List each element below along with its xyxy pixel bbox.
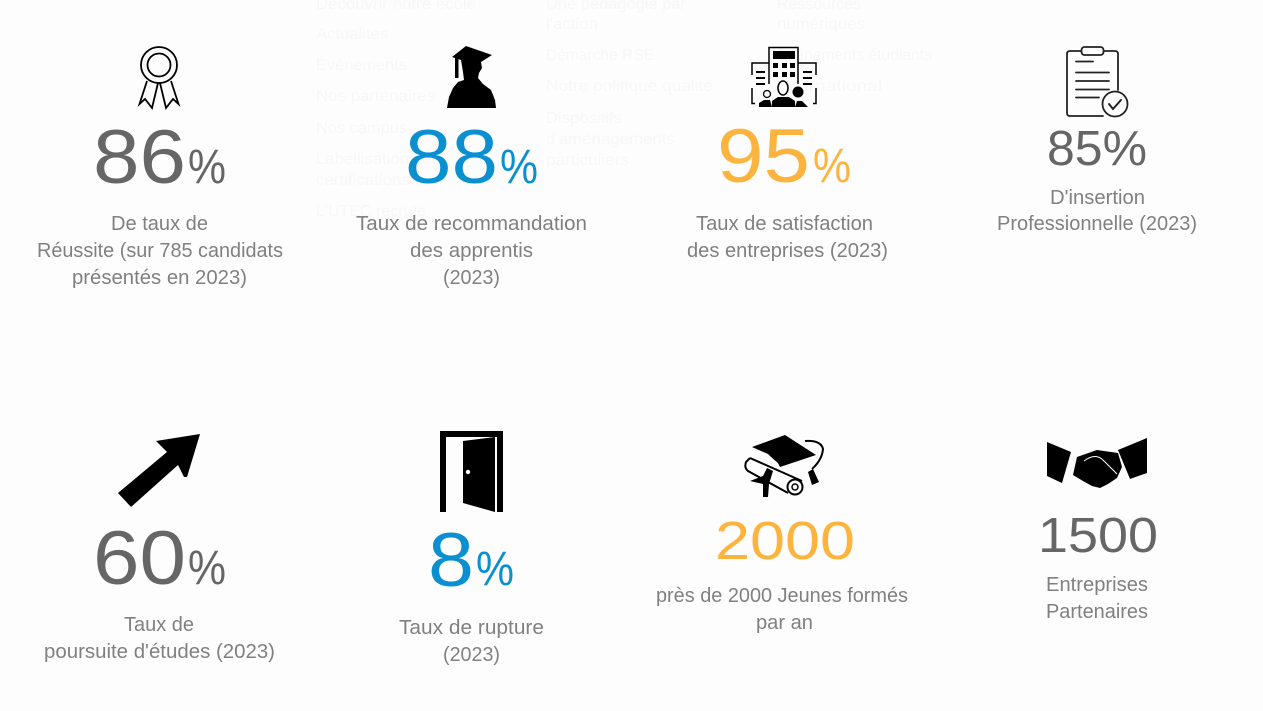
stat: 86%: % [188, 141, 226, 194]
description: De taux de [111, 213, 208, 235]
stat: 88% [405, 115, 538, 200]
stat: 2000: 2000 [715, 511, 855, 571]
description: (2023) [443, 267, 500, 289]
description [44, 614, 275, 663]
panel: entreprises partenaires 1500 [1038, 438, 1158, 623]
stat: 86%: 86 [93, 115, 186, 200]
stat: 95%: 95 [717, 114, 810, 199]
panel: réussite 86% [37, 47, 283, 289]
icon: clipboard with check [1067, 47, 1128, 116]
faint background menu text: particuliers [546, 152, 629, 169]
description: près de 2000 Jeunes formés [656, 585, 908, 607]
faint background menu text [316, 0, 932, 220]
description: des entreprises (2023) [687, 240, 888, 262]
faint background menu text: Actualités [316, 26, 388, 43]
stat: 60%: 60 [93, 516, 186, 601]
faint background menu text: certifications [316, 172, 410, 189]
stat: 88%: 88 [405, 115, 498, 200]
icon: handshake [1047, 438, 1147, 488]
stat: 8%: 8 [428, 518, 474, 603]
description: par an [756, 612, 813, 634]
faint background menu text: Notre politique qualité [546, 78, 713, 95]
faint background menu text: Dispositifs [546, 110, 622, 127]
description: poursuite d'études (2023) [44, 641, 275, 663]
panel: satisfaction 95% [687, 48, 888, 262]
icon: award ribbon [140, 47, 178, 108]
icon: graduate silhouette [447, 46, 496, 108]
description: Entreprises [1046, 574, 1148, 596]
faint background menu text: Événements étudiants [777, 45, 932, 64]
stat: 1500: 1500 [1038, 509, 1158, 563]
faint background menu text: Évènements [316, 55, 407, 74]
description: des apprentis [410, 240, 533, 262]
description: Taux de [124, 614, 194, 636]
icon: graduation cap and diploma [745, 435, 823, 497]
faint background menu text: L'UTEC recrute [316, 203, 426, 220]
description [1046, 574, 1148, 623]
icon: diagonal arrow [118, 434, 200, 507]
description [356, 213, 587, 289]
description: Professionnelle (2023) [997, 213, 1197, 235]
faint background menu text: International [777, 78, 882, 95]
faint background menu text: Labellisations et [316, 151, 437, 168]
stat: 60% [93, 516, 226, 601]
faint background menu text: Nos campus [316, 120, 407, 137]
stat: 95% [717, 114, 851, 199]
description: Taux de satisfaction [696, 213, 873, 235]
faint background menu text: d'aménagements [546, 131, 675, 148]
stat: 95%: % [813, 140, 851, 193]
panel: insertion 85% [997, 47, 1197, 235]
description [37, 213, 283, 289]
stat: 8% [428, 518, 514, 603]
icon: open door [440, 431, 503, 512]
description [656, 585, 908, 634]
description [687, 213, 888, 262]
description: (2023) [443, 644, 500, 666]
panel: recommandation 88% [356, 46, 587, 289]
description: présentés en 2023) [72, 267, 247, 289]
stat: 60%: % [188, 542, 226, 595]
faint background menu text: l'action [546, 16, 598, 33]
panel: jeunes formés 2000 [656, 435, 908, 634]
faint background menu text: numériques [777, 16, 865, 33]
panel: rupture 8% [399, 431, 544, 666]
description: Taux de rupture [399, 617, 544, 639]
description [997, 187, 1197, 235]
stat: 8%: % [476, 543, 514, 596]
description: D'insertion [1050, 187, 1145, 209]
stat: 88%: % [500, 141, 538, 194]
description: Réussite (sur 785 candidats [37, 240, 283, 262]
stat: 86% [93, 115, 226, 200]
faint background menu text: Nos partenaires [316, 88, 435, 105]
description [399, 617, 544, 666]
stat: 85%: 85% [1047, 122, 1147, 176]
faint background menu text: Démarche RSE [546, 47, 654, 64]
description: Partenaires [1046, 601, 1148, 623]
panel: poursuite d'études 60% [44, 434, 275, 663]
icon: building and people [752, 48, 816, 107]
description: Taux de recommandation [356, 213, 587, 235]
